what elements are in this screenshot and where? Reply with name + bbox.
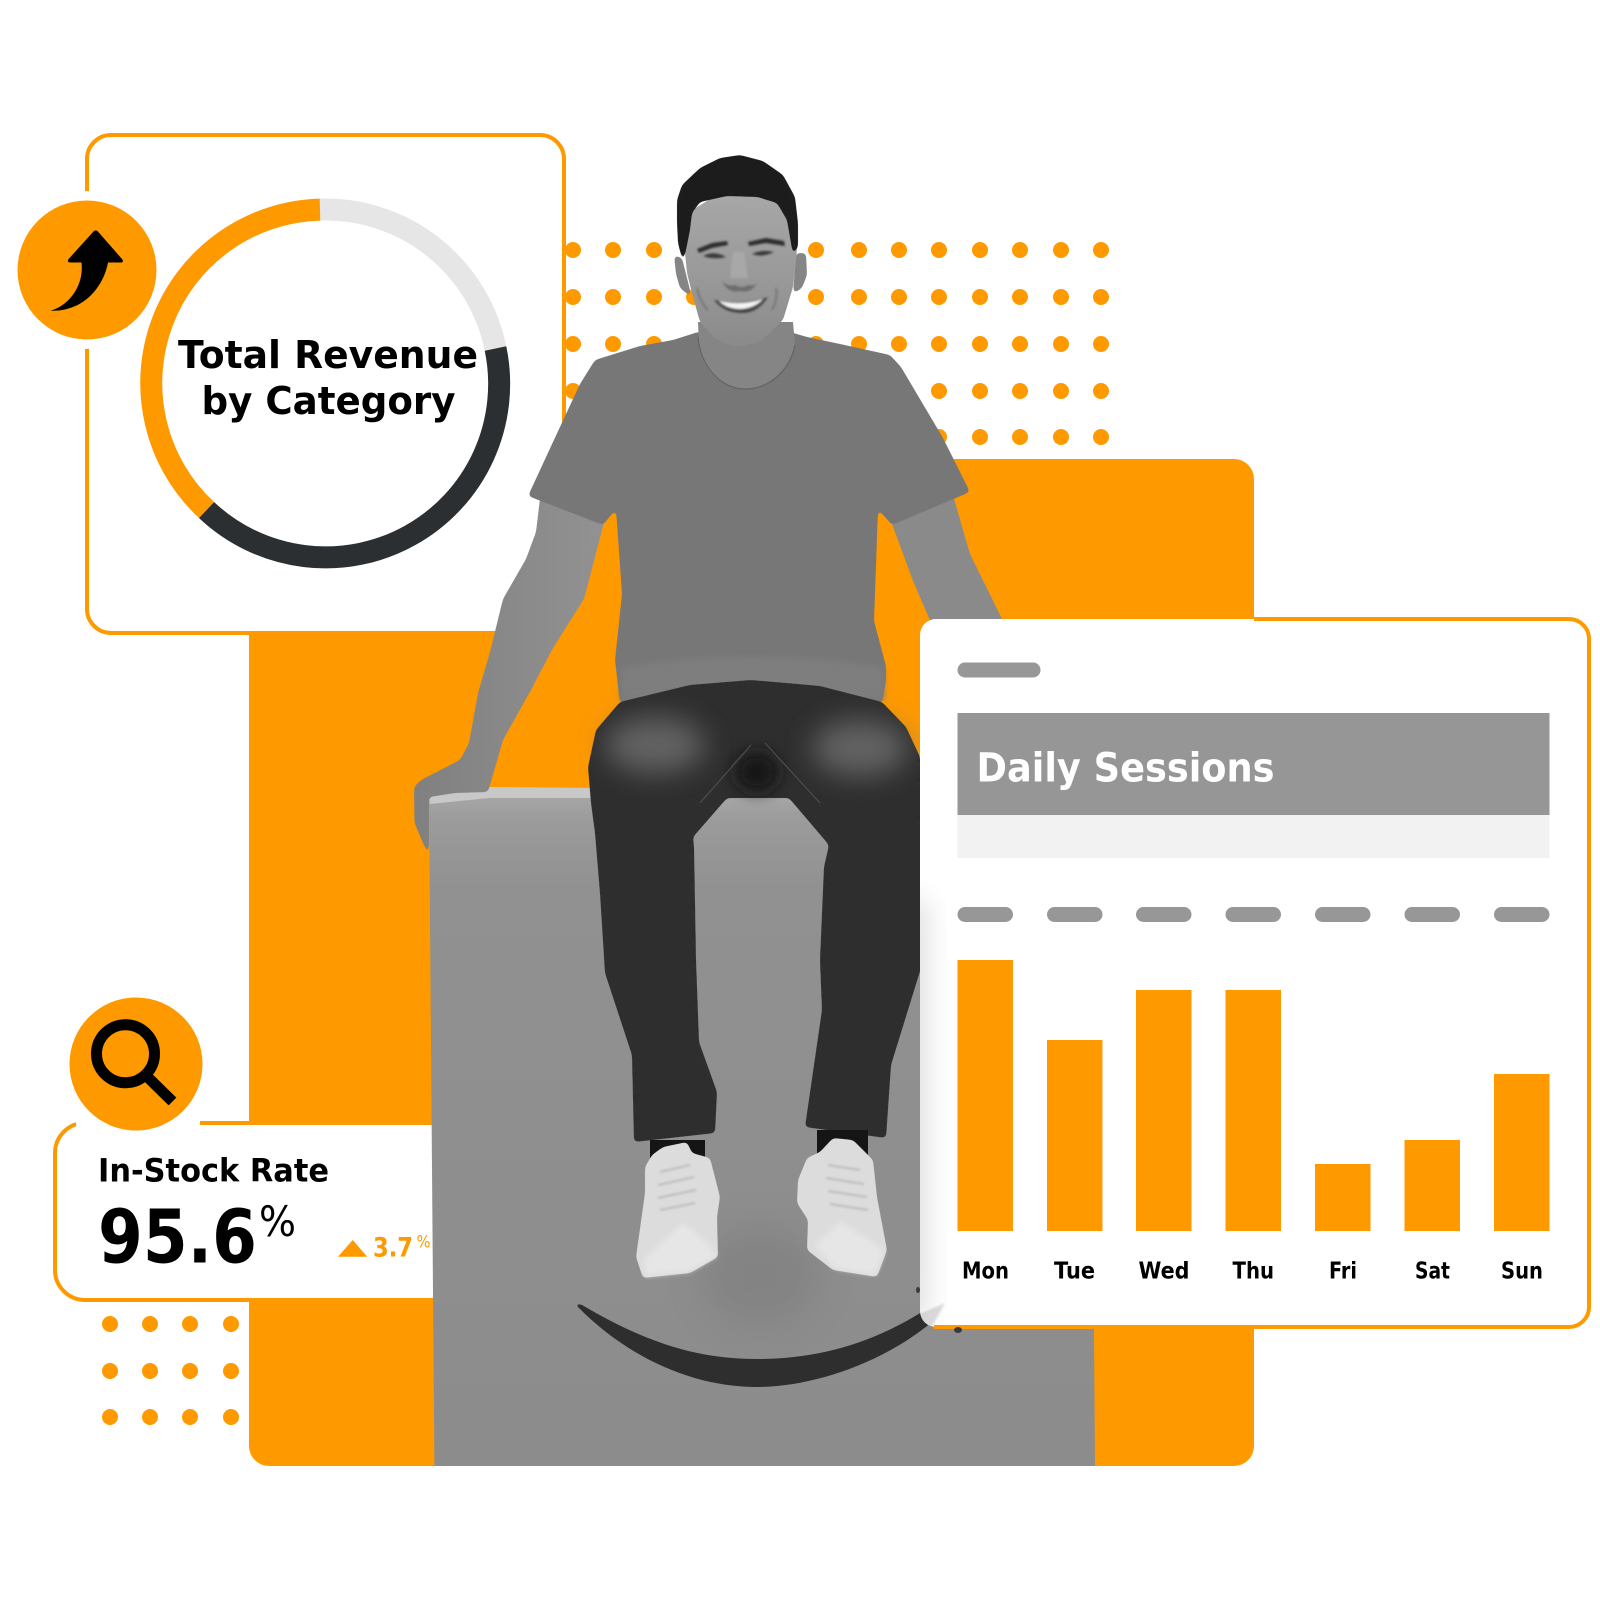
icon: magnifier badge — [70, 998, 202, 1130]
jeans crotch shadow and seams — [700, 743, 820, 803]
right laces — [826, 1165, 868, 1210]
panel frame — [87, 135, 564, 633]
main value percent: % — [259, 1197, 296, 1246]
day labels: Thu — [1232, 1258, 1274, 1284]
day labels: Wed — [1138, 1258, 1190, 1284]
main value: 95.6 — [98, 1194, 257, 1280]
hair — [677, 155, 798, 263]
jeans highlights — [605, 717, 908, 776]
left toe cap — [645, 1223, 716, 1276]
viewer-right arm — [885, 485, 1005, 625]
header pill — [958, 662, 1040, 678]
ear left — [674, 255, 692, 298]
head — [674, 155, 807, 347]
ear right — [793, 253, 807, 294]
right toe cap — [815, 1222, 884, 1274]
frame gap around badge — [8, 191, 166, 349]
right sneaker — [797, 1138, 887, 1277]
card border — [934, 619, 1589, 1327]
nose highlight — [730, 252, 748, 278]
panel: in-stock rate — [55, 998, 475, 1300]
day labels: Tue — [1054, 1258, 1095, 1284]
box smile logo — [578, 1304, 932, 1387]
logo arrow remnants — [916, 1287, 962, 1333]
delta indicator — [338, 1232, 430, 1264]
eyebrows — [697, 238, 785, 253]
card background — [920, 619, 1589, 1327]
donut title — [178, 333, 478, 423]
cardboard box — [429, 787, 1095, 1466]
left sneaker — [636, 1142, 720, 1278]
left laces — [658, 1165, 696, 1210]
socks — [650, 1130, 868, 1158]
title bar: Daily Sessions — [976, 746, 1274, 792]
teeth — [719, 299, 763, 309]
dot grid: top right — [565, 242, 1109, 445]
title bar — [958, 713, 1550, 858]
panel: daily sessions — [895, 619, 1589, 1333]
frame gap around badge — [76, 1117, 200, 1129]
icon: growth arrow badge — [18, 200, 156, 340]
card title: In-Stock Rate — [98, 1152, 329, 1190]
day labels — [962, 1258, 1543, 1284]
face features — [697, 238, 785, 313]
face — [684, 190, 797, 347]
person — [414, 155, 1005, 1278]
panel: total revenue by category — [8, 135, 564, 633]
shirt hem shading — [620, 656, 884, 700]
day labels: Sat — [1415, 1258, 1450, 1284]
bar chart — [958, 960, 1550, 1231]
day labels: Mon — [962, 1258, 1009, 1284]
eyes — [703, 251, 774, 258]
nose shadow — [722, 281, 758, 292]
delta indicator: % — [416, 1232, 430, 1252]
collar line — [698, 337, 795, 389]
dot grid: bottom left — [102, 1316, 239, 1425]
orange background block — [249, 459, 1254, 1466]
card frame — [55, 1123, 475, 1300]
day labels: Sun — [1501, 1258, 1543, 1284]
jeans — [588, 680, 925, 1142]
value pills — [958, 907, 1550, 922]
t-shirt — [528, 332, 970, 703]
smile lines — [697, 288, 776, 310]
ghost of box logo arrow — [920, 1303, 945, 1327]
donut title: Total Revenue — [178, 333, 478, 377]
viewer-left arm and hand — [414, 490, 606, 857]
donut title: by Category — [202, 379, 456, 423]
delta indicator: 3.7 — [373, 1233, 413, 1264]
mouth — [714, 297, 768, 313]
donut chart — [151, 210, 499, 557]
day labels: Fri — [1329, 1258, 1357, 1284]
neck — [698, 322, 795, 389]
card translucent shading — [920, 896, 945, 1326]
